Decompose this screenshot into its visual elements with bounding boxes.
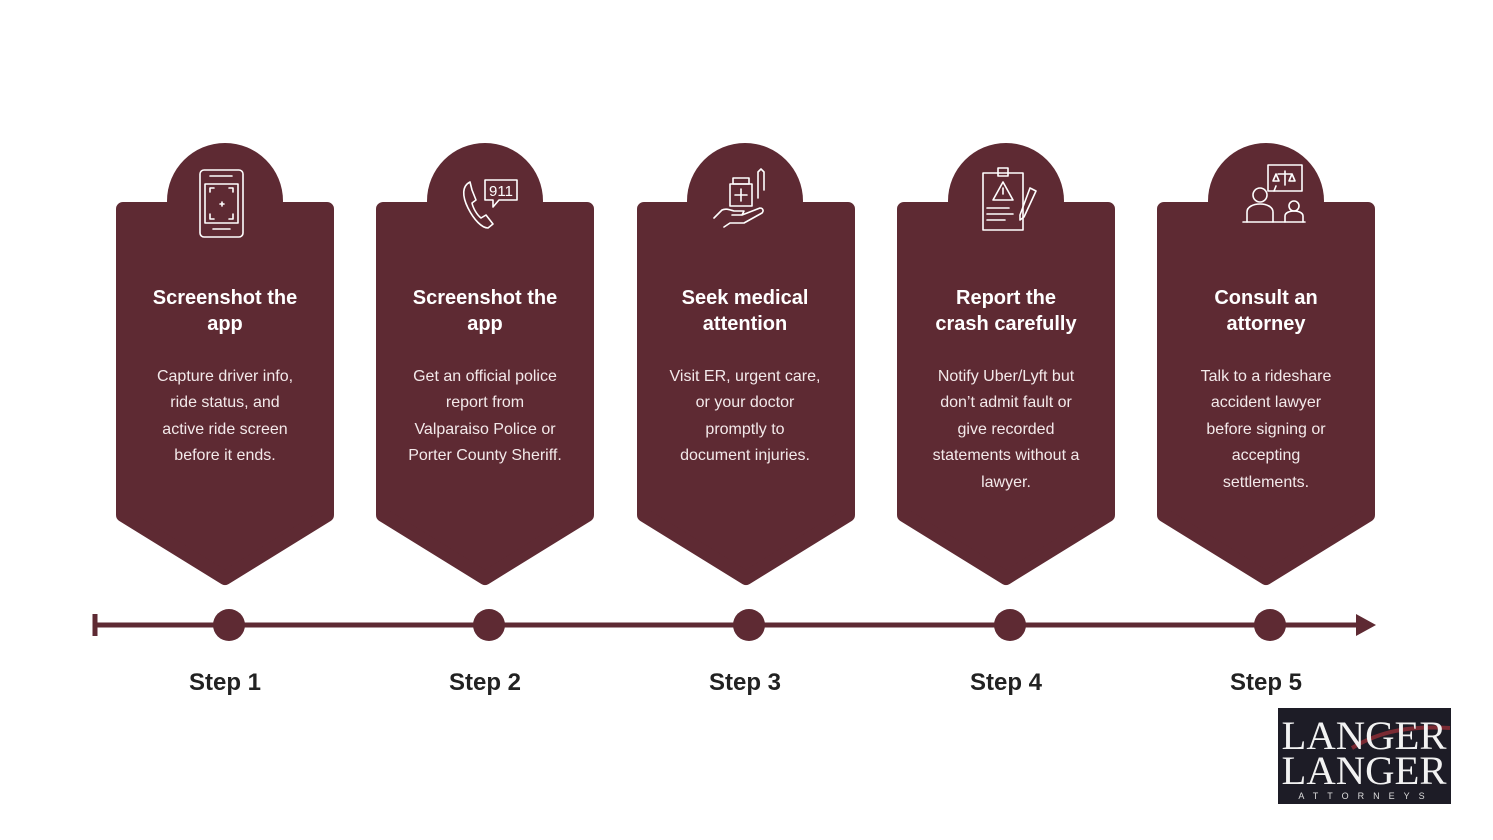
body 3: Visit ER, urgent care, <box>670 368 820 385</box>
body 1: active ride screen <box>162 421 288 438</box>
title 5: Consult an <box>1214 287 1318 309</box>
card 1 <box>123 143 327 578</box>
title 3: attention <box>703 313 787 335</box>
step labels: Step 2 <box>449 669 521 696</box>
icon: attorney consult <box>1243 165 1305 222</box>
icon: 911 call: 911 <box>489 183 513 200</box>
body 3: promptly to <box>705 421 785 438</box>
icon: clipboard warning <box>983 168 1036 230</box>
body 4: give recorded <box>958 421 1054 438</box>
body 3: document injuries. <box>680 447 810 464</box>
body 5: settlements. <box>1223 474 1309 491</box>
card 4 <box>904 143 1108 578</box>
timeline <box>95 609 1376 641</box>
icon: 911 call <box>464 180 517 228</box>
body 4: statements without a <box>933 447 1079 464</box>
body 4: lawyer. <box>981 474 1031 491</box>
title 4: Report the <box>956 287 1056 309</box>
step labels: Step 5 <box>1230 669 1302 696</box>
title 2: Screenshot the <box>413 287 557 309</box>
body 3: or your doctor <box>696 394 795 411</box>
icon: phone screenshot <box>200 170 243 237</box>
step labels <box>189 669 1302 696</box>
card 5 <box>1164 143 1368 578</box>
title 2: app <box>467 313 503 335</box>
body 4: Notify Uber/Lyft but <box>938 368 1075 385</box>
body 1: before it ends. <box>174 447 276 464</box>
card 2 <box>383 143 587 578</box>
card 3 <box>644 143 848 578</box>
body 2: Get an official police <box>413 368 557 385</box>
title 5: attorney <box>1227 313 1306 335</box>
title 1: Screenshot the <box>153 287 297 309</box>
body 2: Porter County Sheriff. <box>408 447 562 464</box>
logo: ATTORNEYS <box>1298 791 1434 801</box>
logo: LANGER <box>1282 748 1447 793</box>
body 5: accident lawyer <box>1211 394 1322 411</box>
body 4: don’t admit fault or <box>940 394 1072 411</box>
logo: LANGER <box>1282 713 1447 758</box>
body 5: before signing or <box>1206 421 1326 438</box>
title 3: Seek medical <box>682 287 808 309</box>
body 1: Capture driver info, <box>157 368 293 385</box>
body 1: ride status, and <box>170 394 280 411</box>
icon: medical hand <box>714 169 764 227</box>
body 2: Valparaiso Police or <box>414 421 556 438</box>
step labels: Step 4 <box>970 669 1043 696</box>
body 2: report from <box>446 394 524 411</box>
title 4: crash carefully <box>935 313 1077 335</box>
body 5: accepting <box>1232 447 1300 464</box>
body 5: Talk to a rideshare <box>1201 368 1331 385</box>
step labels: Step 1 <box>189 669 261 696</box>
title 1: app <box>207 313 243 335</box>
logo <box>1278 708 1451 804</box>
step labels: Step 3 <box>709 669 781 696</box>
